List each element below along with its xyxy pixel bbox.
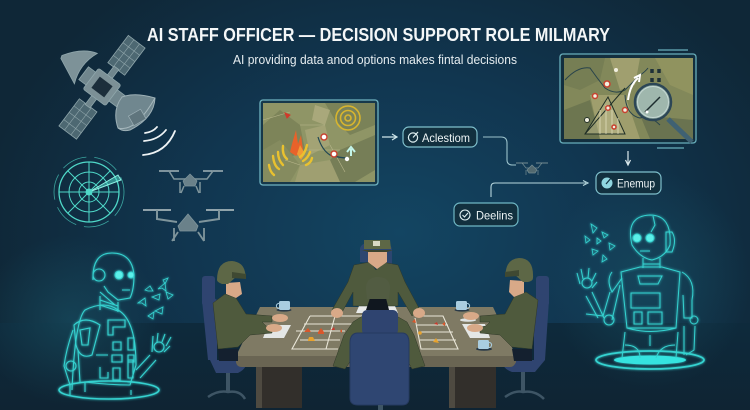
chair: left soldier	[202, 276, 246, 399]
connector to Enemup	[491, 180, 588, 197]
swarm right	[585, 224, 615, 262]
icon: small drone	[516, 163, 548, 175]
tactical grid: left	[292, 316, 362, 349]
icon: radar	[54, 157, 124, 227]
table	[236, 301, 516, 408]
label: Enemup	[596, 172, 661, 194]
icon: drone top	[159, 171, 223, 193]
soldier: front back view	[333, 277, 425, 369]
connector to small drone	[483, 137, 516, 165]
map fire	[290, 130, 305, 160]
map rings	[336, 106, 360, 130]
panel: tactical map right	[560, 50, 696, 148]
coffee cup: right	[454, 301, 470, 312]
soldier: left	[213, 261, 288, 361]
icon: satellite	[27, 11, 157, 148]
paper: right	[462, 324, 490, 338]
title: AI STAFF OFFICER — DECISION SUPPORT ROLE MILMARY	[147, 25, 610, 45]
map arrow	[628, 75, 640, 100]
chair: right soldier	[503, 276, 549, 399]
swarm left	[138, 278, 173, 319]
map route	[318, 134, 355, 161]
paper: center	[356, 306, 398, 313]
arrow to Aclestiom	[382, 134, 397, 140]
soldier: center	[331, 240, 425, 318]
coffee cup: front right	[476, 340, 492, 351]
label: Deelins: Deelins	[476, 208, 513, 222]
paper: left	[263, 325, 291, 338]
panel: tactical map left	[260, 100, 378, 185]
arrow down to Enemup	[626, 151, 630, 165]
map yellow strikes	[269, 145, 312, 175]
chair: center soldier	[360, 243, 392, 264]
subtitle: AI providing data anod options makes fintal decisions	[233, 52, 517, 67]
coffee cup: left	[276, 301, 292, 312]
icon: signal waves	[143, 127, 175, 155]
tactical grid: right	[415, 316, 458, 349]
map markers	[592, 81, 628, 129]
map triangle overlay	[585, 88, 625, 134]
robot: right hologram	[577, 215, 704, 369]
label: Deelins	[454, 203, 518, 226]
label: Aclestiom	[403, 127, 477, 147]
label: Enemup: Enemup	[617, 176, 655, 190]
magnifier	[635, 84, 692, 142]
chair: front	[350, 310, 409, 410]
map markers on table	[304, 319, 445, 343]
label: Aclestiom: Aclestiom	[422, 131, 470, 145]
robot: left hologram	[59, 253, 173, 399]
icon: drone bottom	[143, 210, 234, 241]
soldier: right	[463, 258, 538, 361]
